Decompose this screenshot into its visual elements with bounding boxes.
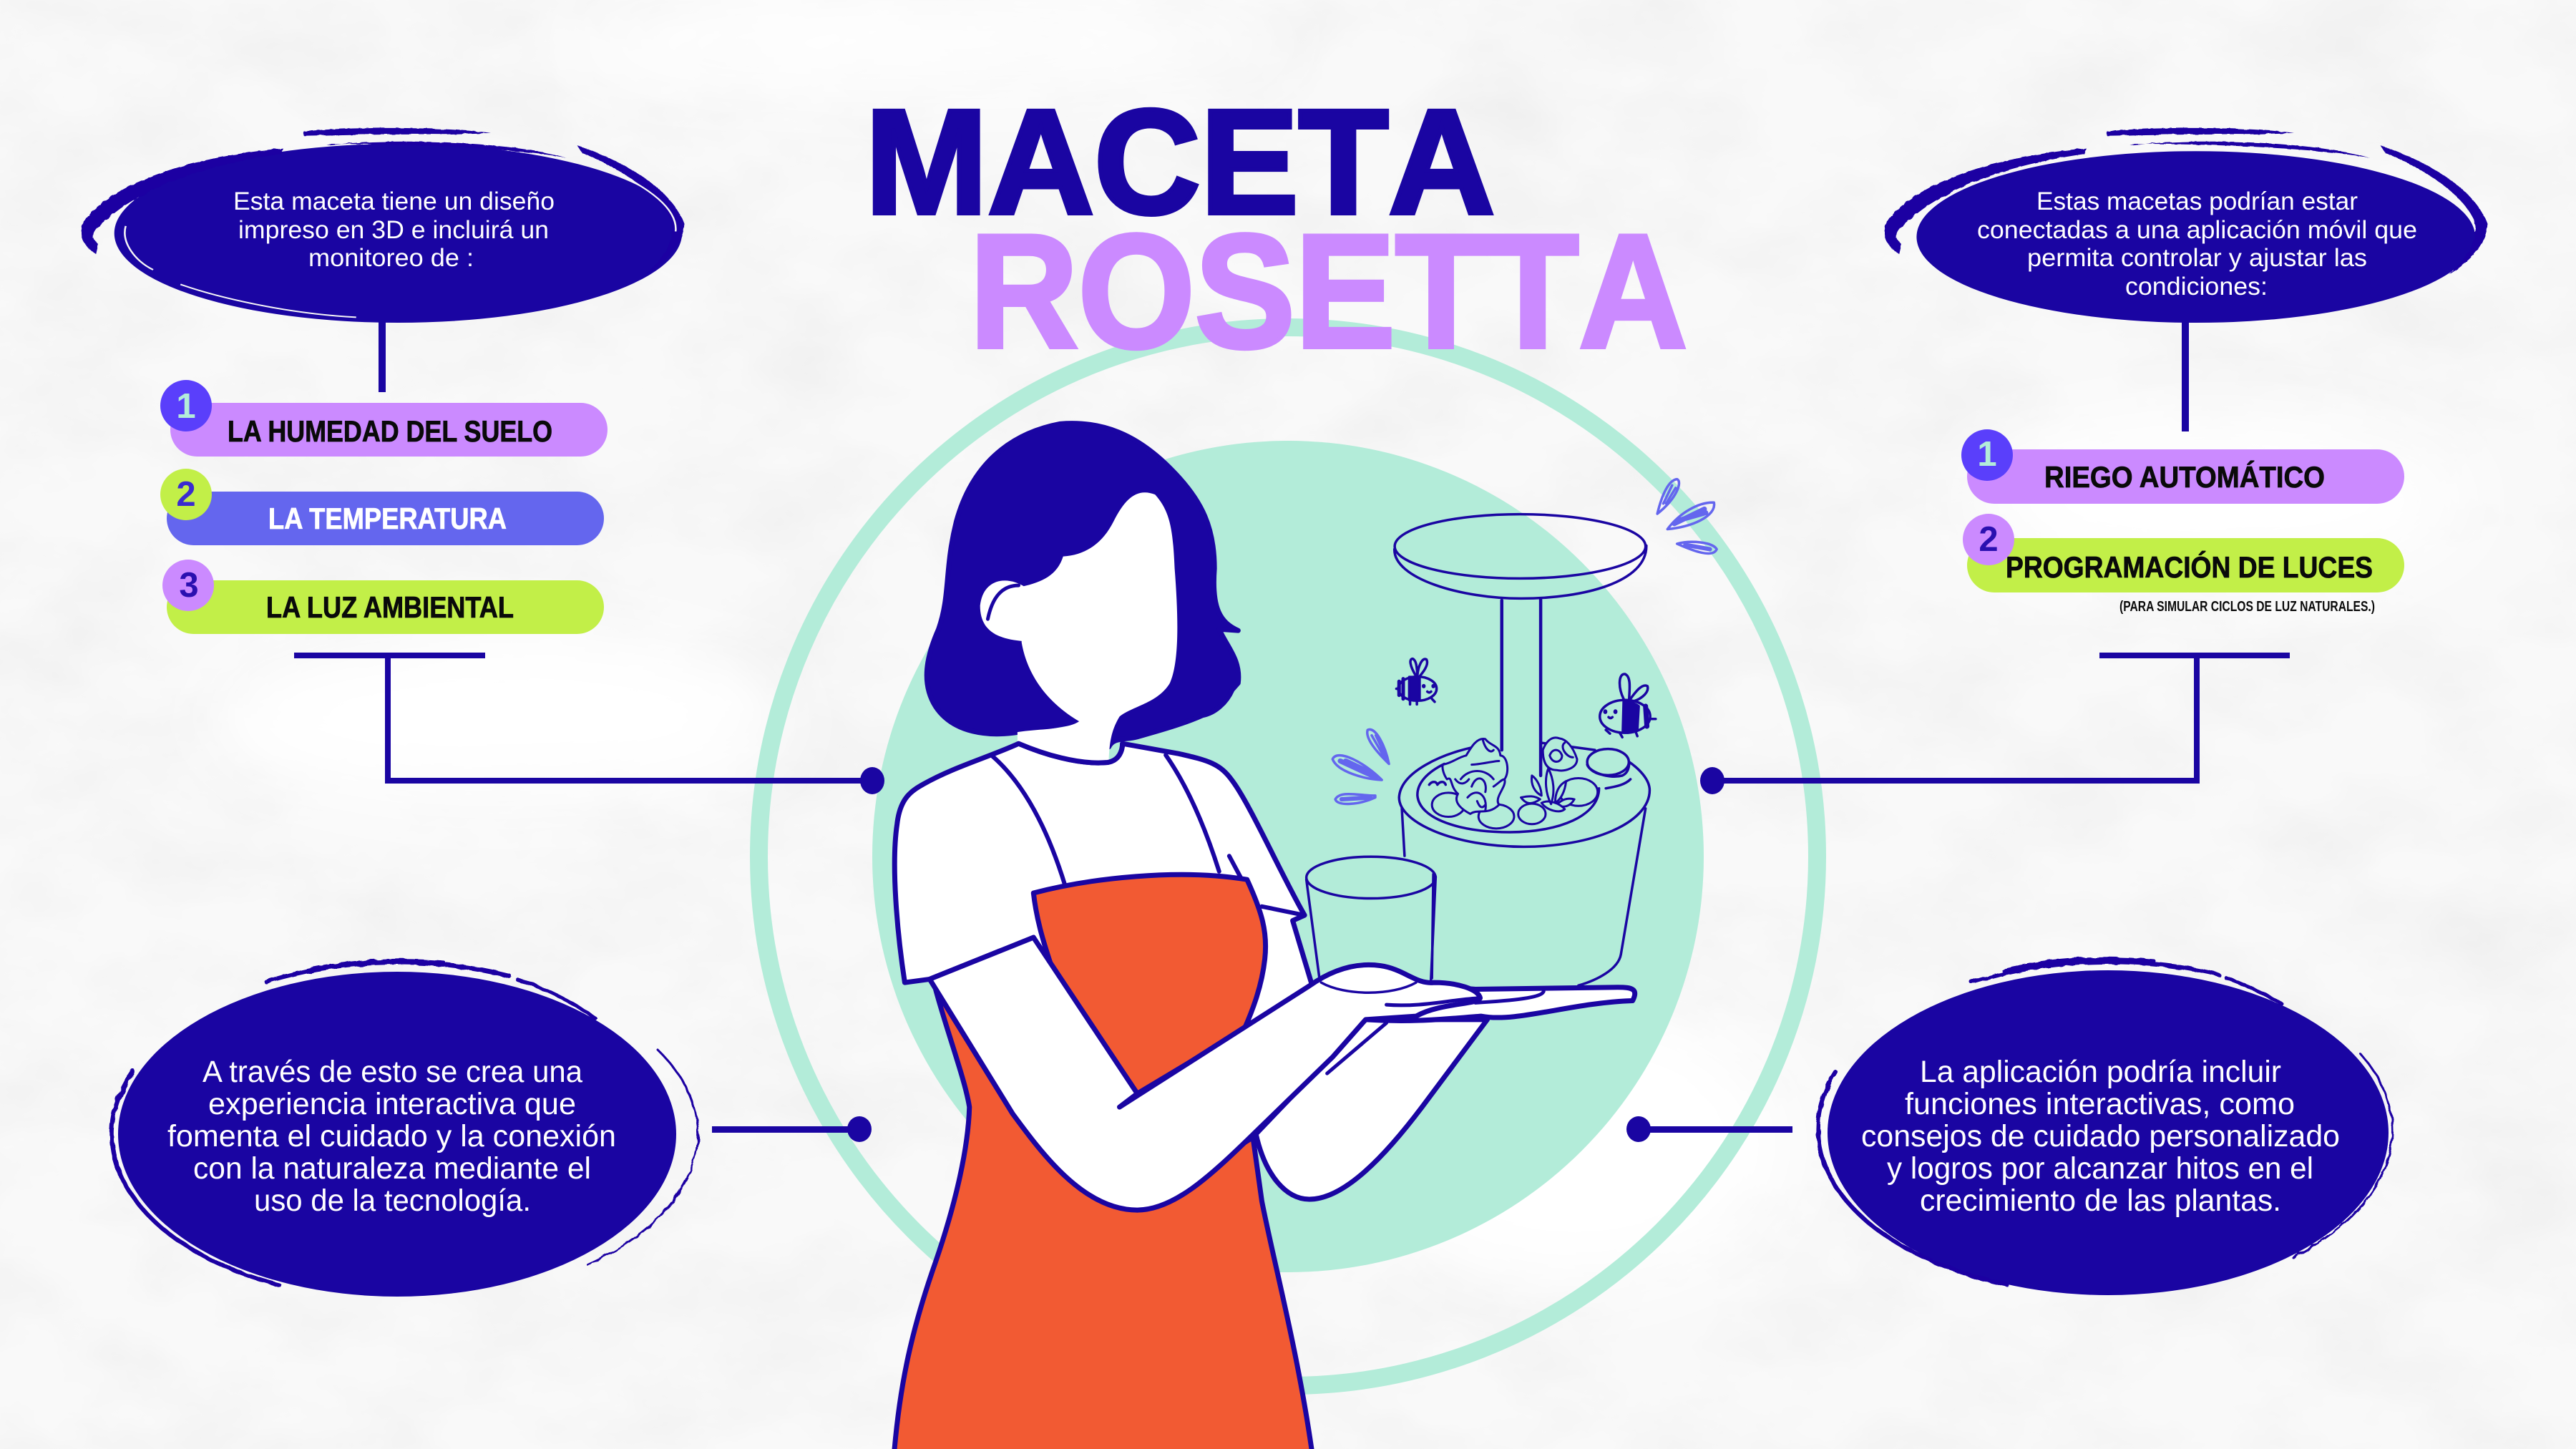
item 2 number bbox=[160, 469, 212, 520]
item 3 pill bbox=[167, 580, 604, 634]
list: left monitoring items bbox=[160, 380, 608, 634]
item 3 number: 3 bbox=[179, 566, 199, 605]
connector: bottom-right bubble bbox=[1626, 1116, 1792, 1142]
glass cup bbox=[1307, 857, 1435, 982]
icon: water drops left bbox=[1332, 729, 1389, 804]
bubble text: y logros por alcanzar hitos en el bbox=[1887, 1151, 2313, 1186]
bubble text: experiencia interactiva que bbox=[208, 1087, 576, 1121]
bubble text: uso de la tecnología. bbox=[254, 1184, 531, 1218]
list: right app features bbox=[1961, 429, 2404, 615]
bubble text: monitoreo de : bbox=[308, 244, 474, 272]
bubble text bbox=[1861, 1055, 2340, 1218]
bubble text: consejos de cuidado personalizado bbox=[1861, 1119, 2340, 1153]
hair bbox=[927, 424, 1239, 747]
title line: MACETA: MACETA bbox=[865, 79, 1495, 245]
plants bbox=[1432, 738, 1598, 829]
brush ellipse bbox=[112, 960, 698, 1297]
item 1 number: 1 bbox=[1977, 435, 1997, 474]
bubble text: La aplicación podría incluir bbox=[1920, 1055, 2281, 1089]
bubble text: condiciones: bbox=[2125, 273, 2268, 301]
item 3 number bbox=[162, 560, 214, 611]
collar line bbox=[1019, 743, 1123, 763]
icon: small bee bbox=[1396, 659, 1437, 704]
illustration: Rosetta smart pot bbox=[1332, 479, 1717, 985]
bubble text: fomenta el cuidado y la conexión bbox=[167, 1119, 616, 1153]
control button bbox=[1587, 749, 1629, 776]
icon: water drops upper right bbox=[1657, 479, 1717, 554]
connector: right list to illustration bbox=[1700, 653, 2290, 794]
item 2 pill: PROGRAMACIÓN DE LUCES bbox=[2006, 550, 2373, 584]
title line: ROSETTA: ROSETTA bbox=[970, 200, 1687, 381]
item 1 number bbox=[1961, 429, 2013, 481]
near arm and palm bbox=[930, 937, 1543, 1210]
apron bib bbox=[1033, 874, 1266, 1093]
bubble text bbox=[167, 1055, 616, 1218]
bubble text: conectadas a una aplicación móvil que bbox=[1977, 216, 2417, 244]
bubble text: permita controlar y ajustar las bbox=[2027, 244, 2367, 272]
ear bbox=[980, 580, 1025, 641]
panel: bottom-right bubble bbox=[1818, 959, 2393, 1295]
item 1 pill: LA HUMEDAD DEL SUELO bbox=[228, 414, 552, 448]
item 3 pill: LA LUZ AMBIENTAL bbox=[266, 590, 514, 624]
bubble text: funciones interactivas, como bbox=[1905, 1087, 2295, 1121]
connector: left list to illustration bbox=[294, 653, 884, 794]
item 2 number: 2 bbox=[1979, 520, 1999, 559]
lamp stem bbox=[1502, 600, 1541, 776]
item 2 pill bbox=[167, 492, 604, 545]
bubble text: A través de esto se crea una bbox=[203, 1055, 582, 1089]
item 1 pill bbox=[1967, 449, 2404, 504]
note under item 2: (PARA SIMULAR CICLOS DE LUZ NATURALES.) bbox=[2119, 599, 2375, 615]
item 1 pill bbox=[170, 403, 608, 457]
bubble text bbox=[233, 187, 555, 272]
item 2 pill: LA TEMPERATURA bbox=[268, 502, 507, 535]
connector: left bubble to list bbox=[379, 321, 386, 392]
bubble text: Esta maceta tiene un diseño bbox=[233, 187, 555, 215]
mint ring bbox=[758, 328, 1818, 1385]
connector: bottom-left bubble bbox=[712, 1116, 872, 1142]
bubble text: crecimiento de las plantas. bbox=[1920, 1184, 2281, 1218]
open hand fingers bbox=[1366, 985, 1635, 1020]
item 1 number bbox=[160, 380, 212, 431]
lamp disc bbox=[1395, 514, 1646, 598]
connector: right bubble to list bbox=[2182, 321, 2189, 431]
item 2 number bbox=[1963, 514, 2014, 565]
title bbox=[865, 79, 1687, 381]
face and neck bbox=[1018, 492, 1177, 761]
bubble text: impreso en 3D e incluirá un bbox=[238, 216, 549, 244]
brush ellipse bbox=[81, 128, 684, 323]
item 2 number: 2 bbox=[176, 475, 196, 514]
brush ellipse bbox=[1818, 959, 2393, 1295]
mint disc bbox=[872, 441, 1704, 1272]
panel: top-left bubble bbox=[81, 128, 684, 323]
item 1 pill: RIEGO AUTOMÁTICO bbox=[2044, 460, 2325, 494]
pot body bbox=[1399, 743, 1649, 985]
item 1 number: 1 bbox=[176, 387, 196, 426]
bubble text bbox=[1977, 187, 2417, 301]
panel: top-right bubble bbox=[1884, 128, 2487, 323]
icon: large bee bbox=[1600, 674, 1656, 737]
dress skirt bbox=[894, 990, 1312, 1449]
bubble text: Estas macetas podrían estar bbox=[2036, 187, 2358, 215]
panel: bottom-left bubble bbox=[112, 960, 698, 1297]
brush ellipse bbox=[1884, 128, 2487, 323]
bubble text: con la naturaleza mediante el bbox=[193, 1151, 591, 1186]
torso and t-shirt bbox=[894, 743, 1312, 1093]
far arm bbox=[1256, 1020, 1487, 1199]
illustration: woman holding the pot bbox=[894, 424, 1635, 1449]
item 2 pill bbox=[1967, 538, 2404, 592]
